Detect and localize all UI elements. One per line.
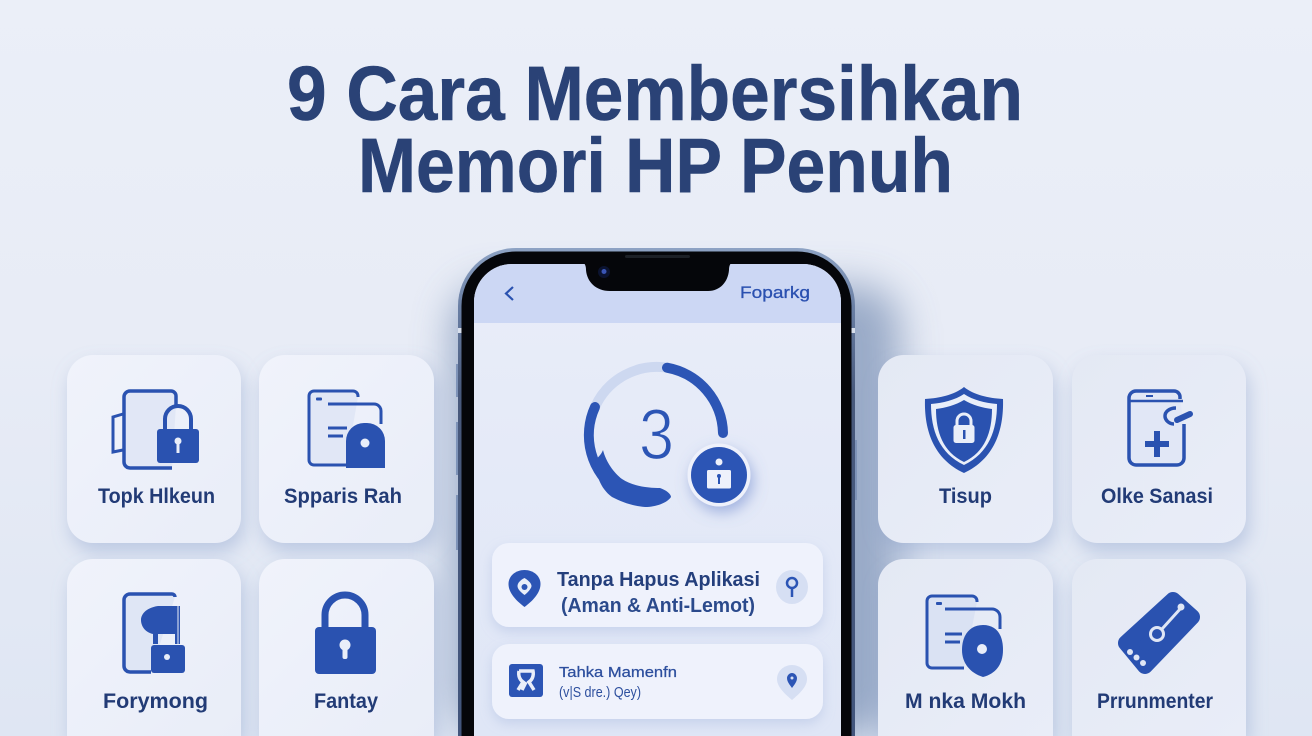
icon: documents with shield: [927, 596, 1003, 677]
phone shadow: [452, 285, 900, 736]
text: Tahka Mamenfn: [559, 665, 677, 681]
shield icon: [508, 570, 540, 607]
ribbon icon: [509, 664, 543, 697]
title: 9 Cara Membersihkan: [287, 51, 1023, 137]
card: M nka Mokh: [878, 559, 1053, 736]
info card 2: [492, 644, 823, 719]
icon: phone with plus: [1129, 391, 1190, 465]
card: Topk Hlkeun: [67, 355, 241, 543]
label: Tisup: [939, 485, 992, 508]
phone body: [458, 248, 855, 736]
icon: tilted phone with key: [1126, 600, 1192, 666]
card: Forymong: [67, 559, 241, 736]
icon: shield with lock: [925, 387, 1003, 473]
phone: [456, 248, 857, 736]
info card 1: [492, 543, 823, 627]
back chevron: [506, 287, 513, 300]
card: Spparis Rah: [259, 355, 434, 543]
card: Prrunmenter: [1072, 559, 1246, 736]
label: Forymong: [103, 690, 208, 713]
title: [287, 51, 1023, 209]
icon: phone with small lock: [124, 594, 185, 673]
label: Fantay: [314, 690, 378, 713]
screen: [474, 264, 841, 736]
app header bar: [474, 264, 841, 323]
label: Topk Hlkeun: [98, 485, 215, 508]
pin badge: [777, 665, 807, 700]
progress ring: [589, 367, 723, 507]
info card 1: (Aman & Anti-Lemot): [561, 594, 755, 617]
header text: Foparkg: [740, 283, 810, 302]
label: Spparis Rah: [284, 485, 402, 508]
card: Tisup: [878, 355, 1053, 543]
card: Olke Sanasi: [1072, 355, 1246, 543]
panel: left feature cards: [67, 355, 434, 736]
card: Fantay: [259, 559, 434, 736]
icon: documents with lock: [309, 391, 385, 468]
key badge: [776, 570, 808, 604]
title: Memori HP Penuh: [358, 123, 953, 209]
info card 2: (v|S dre.) Qey): [559, 685, 641, 701]
text: Tanpa Hapus Aplikasi: [557, 568, 760, 591]
icon: phone with lock: [113, 391, 199, 468]
number: 3: [639, 396, 674, 475]
label: Prrunmenter: [1097, 690, 1213, 713]
label: Olke Sanasi: [1101, 485, 1213, 508]
icon: padlock: [315, 595, 376, 674]
lock badge: [688, 444, 750, 506]
side buttons: [456, 364, 857, 550]
panel: right feature cards: [878, 355, 1246, 736]
notch with camera: [583, 255, 732, 291]
label: M nka Mokh: [905, 690, 1026, 713]
